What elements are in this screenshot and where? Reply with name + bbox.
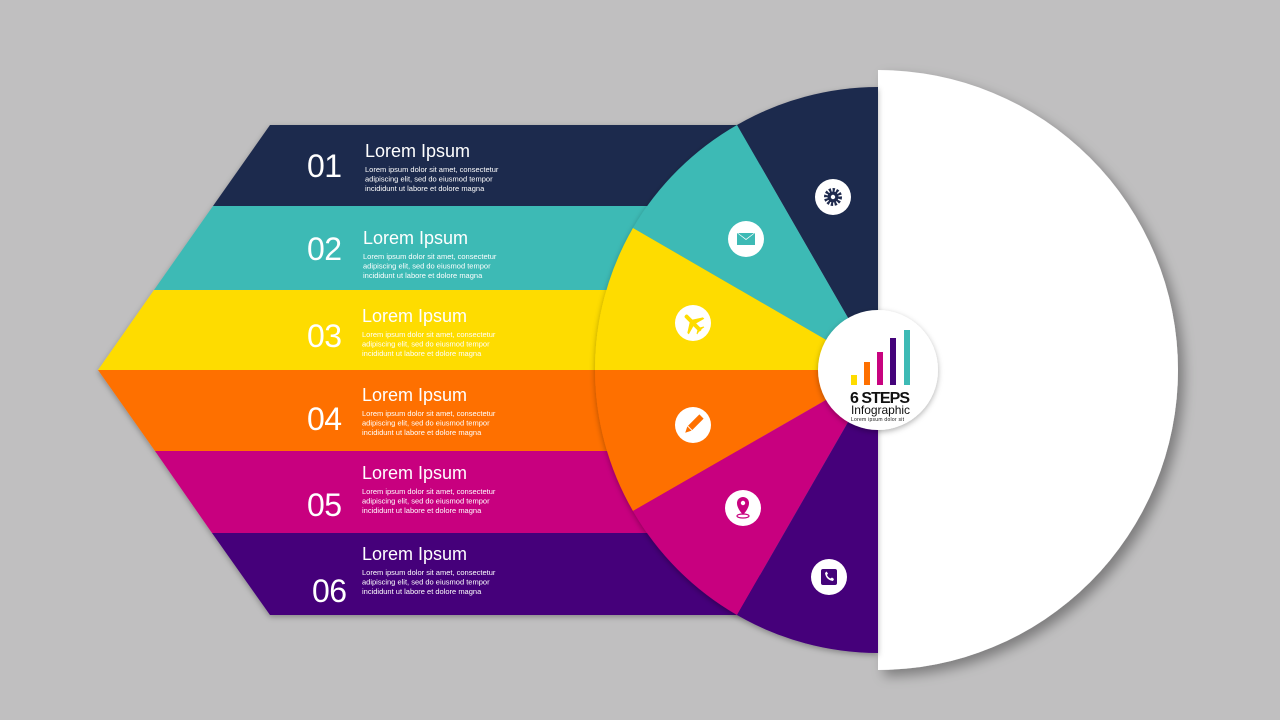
- badge text: Infographic: [851, 403, 910, 417]
- icon: phone: [811, 559, 847, 595]
- icon: gear: [815, 179, 851, 215]
- wedge orange: [595, 370, 878, 511]
- text 06: incididunt ut labore et dolore magna: [362, 587, 482, 596]
- text 02: Lorem ipsum dolor sit amet, consectetur: [363, 252, 497, 261]
- text 01: incididunt ut labore et dolore magna: [365, 184, 485, 193]
- text 04: [307, 385, 496, 437]
- text 04: 04: [307, 401, 342, 437]
- text 01: 01: [307, 148, 342, 184]
- text 06: 06: [312, 573, 347, 609]
- wedge teal: [633, 125, 878, 370]
- band 05: [155, 451, 760, 533]
- text 05: Lorem Ipsum: [362, 463, 467, 483]
- text 02: adipiscing elit, sed do eiusmod tempor: [363, 262, 491, 270]
- icon: envelope: [728, 221, 764, 257]
- text 04: Lorem ipsum dolor sit amet, consectetur: [362, 409, 496, 418]
- wedge magenta: [633, 370, 878, 615]
- bar chart icon: [851, 330, 910, 385]
- text 01: Lorem Ipsum: [365, 141, 470, 161]
- band 04: [98, 370, 760, 451]
- wedge yellow: [595, 228, 878, 370]
- text 03: 03: [307, 318, 342, 354]
- badge text: 6 STEPS: [850, 390, 910, 407]
- text 05: incididunt ut labore et dolore magna: [362, 506, 482, 515]
- band 02: [154, 206, 760, 290]
- icon: plane: [675, 305, 711, 341]
- text 02: Lorem Ipsum: [363, 228, 468, 248]
- band 03: [98, 290, 760, 370]
- white half circle: [878, 70, 1178, 670]
- text 06: adipiscing elit, sed do eiusmod tempor: [362, 578, 490, 586]
- arrow bands: [98, 125, 760, 615]
- text 03: adipiscing elit, sed do eiusmod tempor: [362, 340, 490, 348]
- text 01: [307, 141, 499, 193]
- text 05: [307, 463, 496, 523]
- text 01: adipiscing elit, sed do eiusmod tempor: [365, 174, 493, 184]
- text 02: incididunt ut labore et dolore magna: [363, 271, 483, 280]
- text 02: [307, 228, 497, 280]
- band 01: [213, 125, 760, 206]
- text 06: [312, 544, 496, 609]
- wedge navy: [737, 87, 878, 370]
- text 04: incididunt ut labore et dolore magna: [362, 428, 482, 437]
- text 04: Lorem Ipsum: [362, 385, 467, 405]
- text 05: adipiscing elit, sed do eiusmod tempor: [362, 496, 490, 506]
- text 03: Lorem ipsum dolor sit amet, consectetur: [362, 330, 496, 339]
- text 03: [307, 306, 496, 358]
- text 06: Lorem ipsum dolor sit amet, consectetur: [362, 568, 496, 577]
- pie wedges: [595, 87, 878, 653]
- wedge purple: [737, 370, 878, 653]
- text 03: incididunt ut labore et dolore magna: [362, 349, 482, 358]
- text 05: Lorem ipsum dolor sit amet, consectetur: [362, 487, 496, 496]
- icon: map pin: [725, 490, 761, 526]
- band 06: [212, 533, 760, 615]
- badge text: [850, 390, 910, 423]
- text 03: Lorem Ipsum: [362, 306, 467, 326]
- icon: pencil: [675, 407, 711, 443]
- text 02: 02: [307, 231, 342, 267]
- text 04: adipiscing elit, sed do eiusmod tempor: [362, 418, 490, 428]
- text 01: Lorem ipsum dolor sit amet, consectetur: [365, 165, 499, 174]
- center badge: [818, 310, 938, 430]
- band texts: [307, 141, 499, 609]
- text 06: Lorem Ipsum: [362, 544, 467, 564]
- text 05: 05: [307, 487, 342, 523]
- badge text: Lorem ipsum dolor sit: [851, 417, 905, 423]
